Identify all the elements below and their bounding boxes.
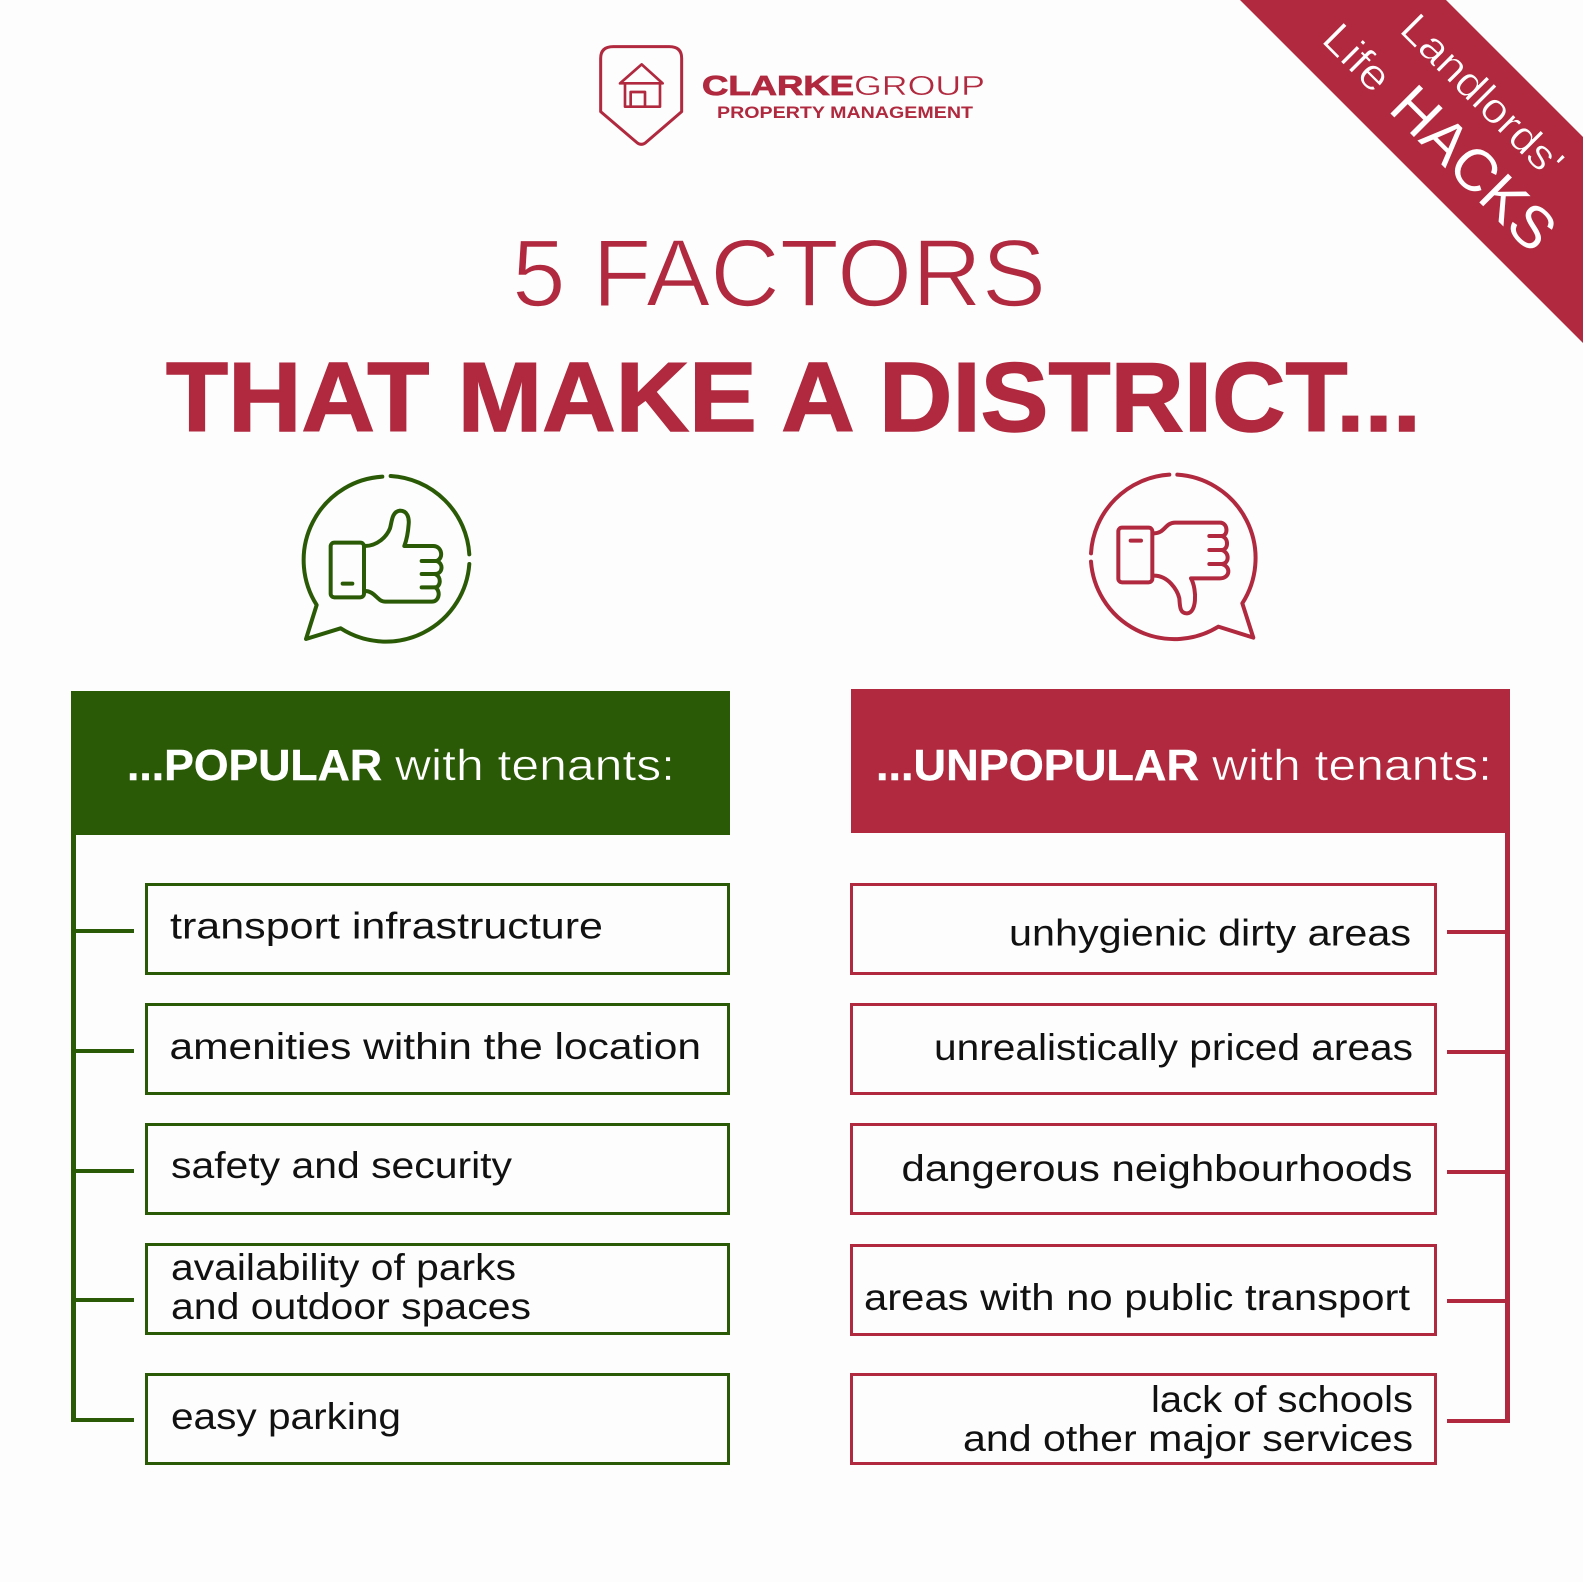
heading: popular	[71, 691, 730, 835]
corner ribbon: Landlords' Life HACKS	[1240, 0, 1583, 343]
item: availability of parks and outdoor spaces: and outdoor spaces	[171, 1286, 531, 1327]
item: amenities within the location: amenities within the location	[170, 1026, 701, 1067]
item: areas with no public transport: areas with no public transport	[864, 1277, 1411, 1318]
item: transport infrastructure: transport infrastructure	[170, 906, 603, 946]
brand name	[702, 70, 985, 122]
icon: house in shield	[601, 47, 682, 144]
item: easy parking: easy parking	[171, 1396, 401, 1437]
panel: unpopular with tenants	[851, 689, 1510, 1464]
item: unhygienic dirty areas	[852, 884, 1436, 974]
item: areas with no public transport	[852, 1246, 1436, 1334]
item: unhygienic dirty areas: unhygienic dirty areas	[1009, 912, 1411, 954]
item: unrealistically priced areas	[852, 1004, 1436, 1094]
title	[166, 220, 1421, 452]
item: safety and security	[146, 1124, 728, 1214]
item: dangerous neighbourhoods	[852, 1124, 1436, 1214]
item: availability of parks and outdoor spaces: availability of parks	[171, 1247, 516, 1288]
brand name: CLARKE	[702, 70, 854, 101]
item: lack of schools and other major services: and other major services	[963, 1418, 1413, 1459]
item: lack of schools and other major services: lack of schools	[1151, 1379, 1413, 1420]
corner ribbon: Landlords' Life HACKS: Life	[1313, 14, 1401, 102]
item: transport infrastructure	[146, 884, 728, 974]
title: 5 FACTORS	[512, 220, 1046, 327]
heading: popular: ...POPULAR	[127, 741, 382, 790]
title: THAT MAKE A DISTRICT...	[166, 342, 1421, 452]
item: availability of parks and outdoor spaces	[146, 1244, 728, 1334]
item: unrealistically priced areas: unrealistically priced areas	[934, 1027, 1413, 1068]
corner ribbon: Landlords' Life HACKS: HACKS	[1378, 73, 1569, 264]
icon: thumbs up speech bubble	[304, 476, 469, 642]
item: dangerous neighbourhoods: dangerous neighbourhoods	[902, 1148, 1412, 1189]
connector tree: green	[71, 835, 134, 1422]
item: lack of schools and other major services	[852, 1374, 1436, 1464]
item: amenities within the location	[146, 1004, 728, 1094]
heading: unpopular: ...UNPOPULAR	[876, 741, 1199, 790]
logo: Clarke Group Property Management	[601, 47, 985, 144]
corner ribbon: Landlords' Life HACKS: Landlords'	[1392, 4, 1573, 186]
brand name: GROUP	[854, 70, 985, 101]
brand name: PROPERTY MANAGEMENT	[717, 104, 973, 122]
heading: unpopular: with tenants:	[1211, 741, 1492, 790]
heading: popular: with tenants:	[394, 741, 675, 790]
icon: thumbs down speech bubble	[1091, 475, 1256, 639]
item: safety and security: safety and security	[171, 1145, 513, 1186]
item: easy parking	[146, 1374, 728, 1464]
connector tree: red	[1447, 833, 1510, 1423]
panel: popular with tenants	[71, 691, 730, 1464]
heading: unpopular	[851, 689, 1510, 833]
